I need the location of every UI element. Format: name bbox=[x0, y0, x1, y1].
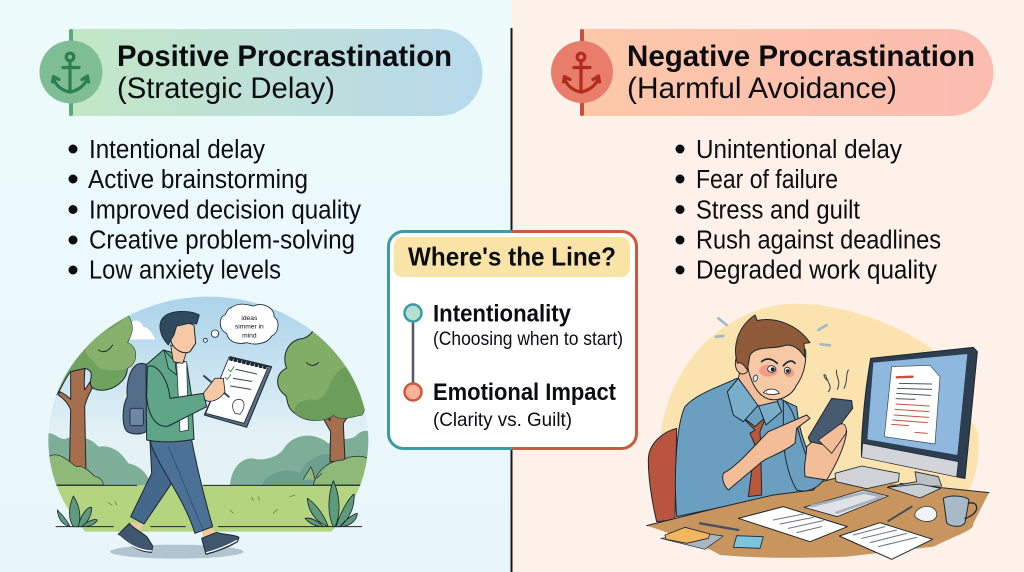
positive bullet list bbox=[68, 136, 361, 284]
callout heading: Where's the Line? bbox=[408, 242, 616, 272]
text: intentionality bbox=[433, 300, 623, 350]
marker: intentionality bbox=[404, 304, 422, 322]
positive heading text: Positive Procrastination bbox=[117, 40, 452, 73]
thought bubble text: ideas bbox=[241, 315, 258, 322]
icon: red anchor bbox=[564, 53, 600, 92]
thought bubble text: mind bbox=[242, 332, 257, 339]
positive bullet list: Low anxiety levels bbox=[89, 256, 281, 284]
icon: green anchor bbox=[52, 53, 88, 92]
marker: emotional impact bbox=[404, 384, 422, 400]
thought bubble text: simmer in bbox=[235, 324, 264, 331]
panel: positive procrastination bbox=[40, 29, 482, 559]
negative bullet list: Rush against deadlines bbox=[696, 226, 941, 254]
negative bullet list: Unintentional delay bbox=[696, 136, 902, 164]
positive bullet list: Intentional delay bbox=[89, 136, 265, 164]
negative subheading text: (Harmful Avoidance) bbox=[627, 72, 897, 105]
negative bullet list: Stress and guilt bbox=[696, 196, 860, 224]
negative bullet list: Fear of failure bbox=[696, 166, 838, 194]
negative heading text: Negative Procrastination bbox=[627, 40, 975, 73]
text: intentionality: (Choosing when to start) bbox=[433, 328, 623, 350]
thought bubble text bbox=[235, 315, 264, 339]
positive heading banner bbox=[40, 29, 482, 116]
text: emotional impact: Emotional Impact bbox=[433, 379, 616, 406]
text: intentionality: Intentionality bbox=[433, 300, 572, 328]
positive subheading text: (Strategic Delay) bbox=[117, 72, 335, 105]
positive bullet list: Active brainstorming bbox=[88, 166, 308, 194]
text: emotional impact bbox=[433, 379, 616, 431]
illustration: stressed man at desk with phone bbox=[647, 304, 989, 559]
timeline connector bbox=[412, 313, 414, 392]
panel: negative procrastination bbox=[551, 29, 994, 559]
center callout card bbox=[388, 232, 636, 448]
right background panel bbox=[512, 0, 1024, 572]
left background panel bbox=[0, 0, 512, 572]
negative bullet list: Degraded work quality bbox=[696, 256, 937, 284]
negative heading banner bbox=[551, 29, 994, 116]
positive bullet list: Creative problem-solving bbox=[89, 226, 355, 254]
negative bullet list bbox=[676, 136, 941, 284]
center divider line bbox=[510, 28, 512, 572]
illustration: man walking in park with notebook bbox=[40, 293, 377, 559]
positive bullet list: Improved decision quality bbox=[89, 196, 361, 224]
text: emotional impact: (Clarity vs. Guilt) bbox=[433, 409, 572, 431]
